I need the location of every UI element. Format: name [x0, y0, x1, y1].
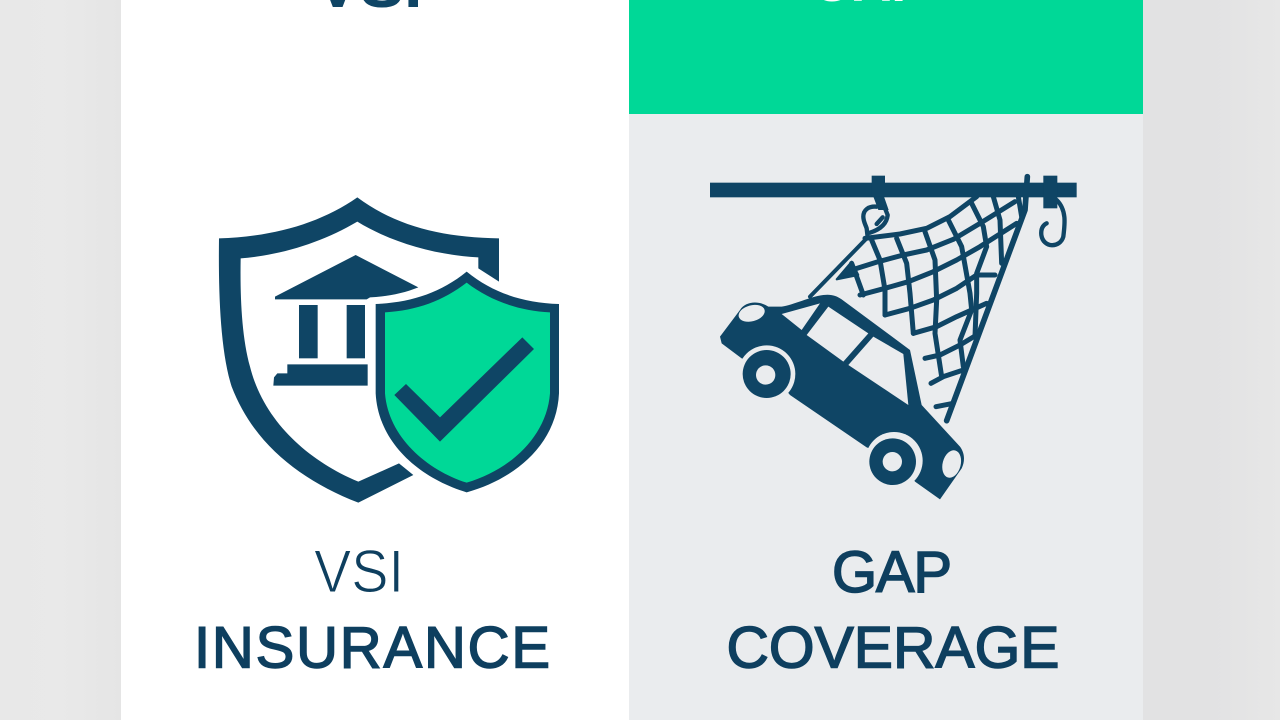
green shield — [376, 272, 559, 492]
page background right — [1143, 0, 1280, 720]
front wheel — [738, 345, 795, 403]
net edges — [810, 177, 1027, 421]
panel background — [629, 114, 1143, 720]
rail with clamps — [710, 176, 1077, 210]
label: GAP: GAP — [832, 540, 952, 605]
label: INSURANCE: INSURANCE — [194, 616, 550, 680]
windows — [737, 302, 964, 480]
net — [837, 197, 1022, 407]
label: VSI: VSI — [314, 538, 404, 605]
car — [720, 295, 964, 499]
hooks — [863, 200, 1065, 245]
panel background — [121, 0, 629, 720]
icon: bank shield with check — [219, 197, 559, 503]
bank building — [273, 255, 418, 386]
green header band — [629, 0, 1143, 114]
icon: car caught in safety net — [710, 176, 1077, 499]
label: COVERAGE: COVERAGE — [726, 616, 1060, 680]
panel: GAP coverage — [629, 0, 1143, 720]
panel: VSI insurance — [121, 0, 629, 720]
page background left — [0, 0, 121, 720]
outer shield outline — [219, 197, 499, 503]
rear wheel — [865, 432, 923, 489]
